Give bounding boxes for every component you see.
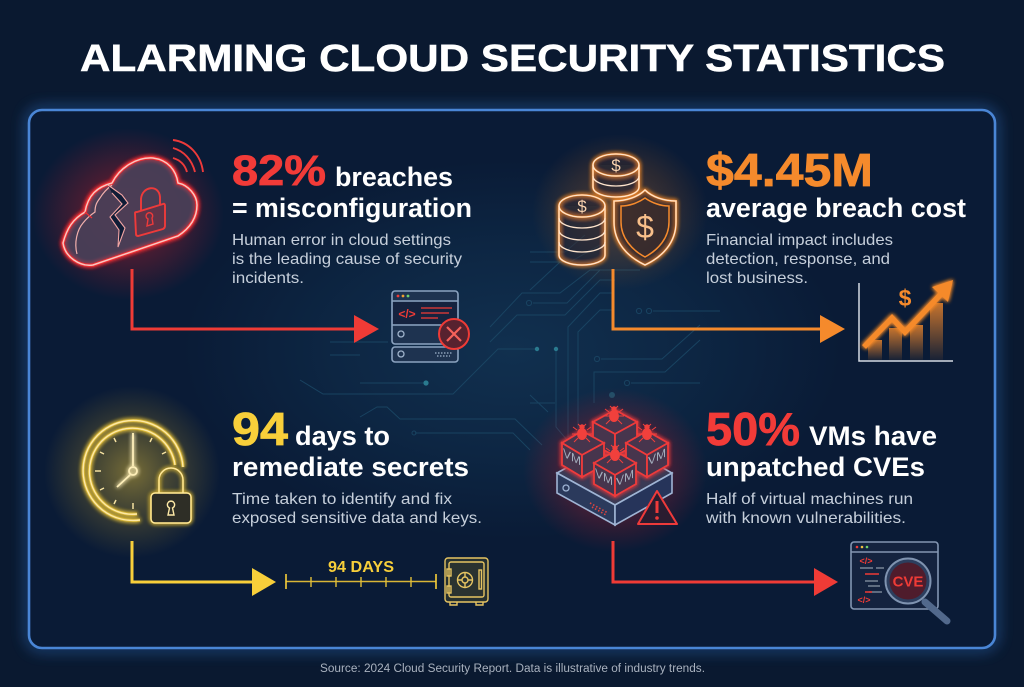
- headline: = misconfiguration: [232, 193, 472, 223]
- description: exposed sensitive data and keys.: [232, 510, 482, 527]
- bug: left: [572, 424, 592, 442]
- headline: [232, 147, 472, 223]
- description: Human error in cloud settings: [232, 232, 451, 249]
- description: [232, 491, 482, 527]
- icon: clock with lock: [44, 386, 220, 558]
- icon: coins and shield: $: [577, 197, 587, 216]
- icon: infected VMs on server: VM: [648, 445, 666, 468]
- arrow: [613, 269, 845, 343]
- icon: CVE scan window: </>: [857, 595, 871, 605]
- source footnote: Source: 2024 Cloud Security Report. Data is illustrative of industry trends.: [320, 663, 705, 675]
- headline: unpatched CVEs: [706, 452, 925, 482]
- icon: CVE scan window: [851, 542, 947, 621]
- main panel: [29, 110, 995, 648]
- arrow: [613, 541, 838, 596]
- headline: days to: [295, 421, 390, 451]
- headline: [706, 403, 937, 482]
- headline: [232, 403, 469, 482]
- description: Time taken to identify and fix: [232, 491, 452, 508]
- icon: infected VMs on server: VM: [616, 466, 634, 489]
- icon: coins and shield: [532, 134, 708, 290]
- warning triangle: [638, 491, 677, 524]
- stat card: unpatched VMs: [523, 388, 947, 621]
- icon: rising cost chart: [859, 280, 953, 361]
- stat card: breach cost: [532, 134, 966, 361]
- description: [706, 232, 893, 287]
- icon: broken cloud with lock: [32, 128, 224, 300]
- arrow: [132, 269, 379, 343]
- icon: infected VMs on server: VM: [595, 465, 613, 488]
- timeline: 94 days: [286, 559, 436, 589]
- title: ALARMING CLOUD SECURITY STATISTICS: [80, 38, 945, 80]
- icon: server with error: </>: [398, 307, 416, 321]
- headline: 94: [232, 403, 288, 455]
- icon: infected VMs on server: VM: [563, 445, 581, 468]
- icon: server with error: [392, 291, 469, 362]
- description: is the leading cause of security: [232, 251, 462, 268]
- timeline: 94 days: 94 DAYS: [328, 559, 394, 576]
- description: [232, 232, 462, 287]
- headline: breaches: [335, 162, 453, 192]
- headline: $4.45M: [706, 144, 873, 196]
- icon: rising cost chart: $: [899, 285, 912, 311]
- stat card: misconfiguration: [32, 128, 472, 362]
- arrow: [132, 541, 276, 596]
- bug: front: [605, 445, 625, 463]
- icon: CVE scan window: </>: [859, 556, 873, 566]
- description: Financial impact includes: [706, 232, 893, 249]
- description: lost business.: [706, 270, 808, 287]
- server base: [557, 441, 672, 525]
- icon: CVE scan window: CVE: [893, 574, 923, 590]
- headline: [706, 144, 966, 223]
- description: incidents.: [232, 270, 304, 287]
- description: [705, 491, 913, 527]
- description: Half of virtual machines run: [706, 491, 913, 508]
- icon: safe: [445, 558, 488, 605]
- description: detection, response, and: [706, 251, 890, 268]
- headline: VMs have: [809, 421, 937, 451]
- headline: remediate secrets: [232, 452, 469, 482]
- headline: 50%: [706, 403, 800, 455]
- headline: 82%: [232, 147, 326, 195]
- description: with known vulnerabilities.: [705, 510, 906, 527]
- bug: right: [637, 424, 657, 442]
- bug: back: [604, 406, 624, 424]
- headline: average breach cost: [706, 193, 966, 223]
- icon: coins and shield: $: [611, 156, 621, 175]
- stat card: remediation time: [44, 386, 488, 605]
- icon: infected VMs on server: [523, 388, 707, 552]
- icon: coins and shield: $: [636, 209, 654, 245]
